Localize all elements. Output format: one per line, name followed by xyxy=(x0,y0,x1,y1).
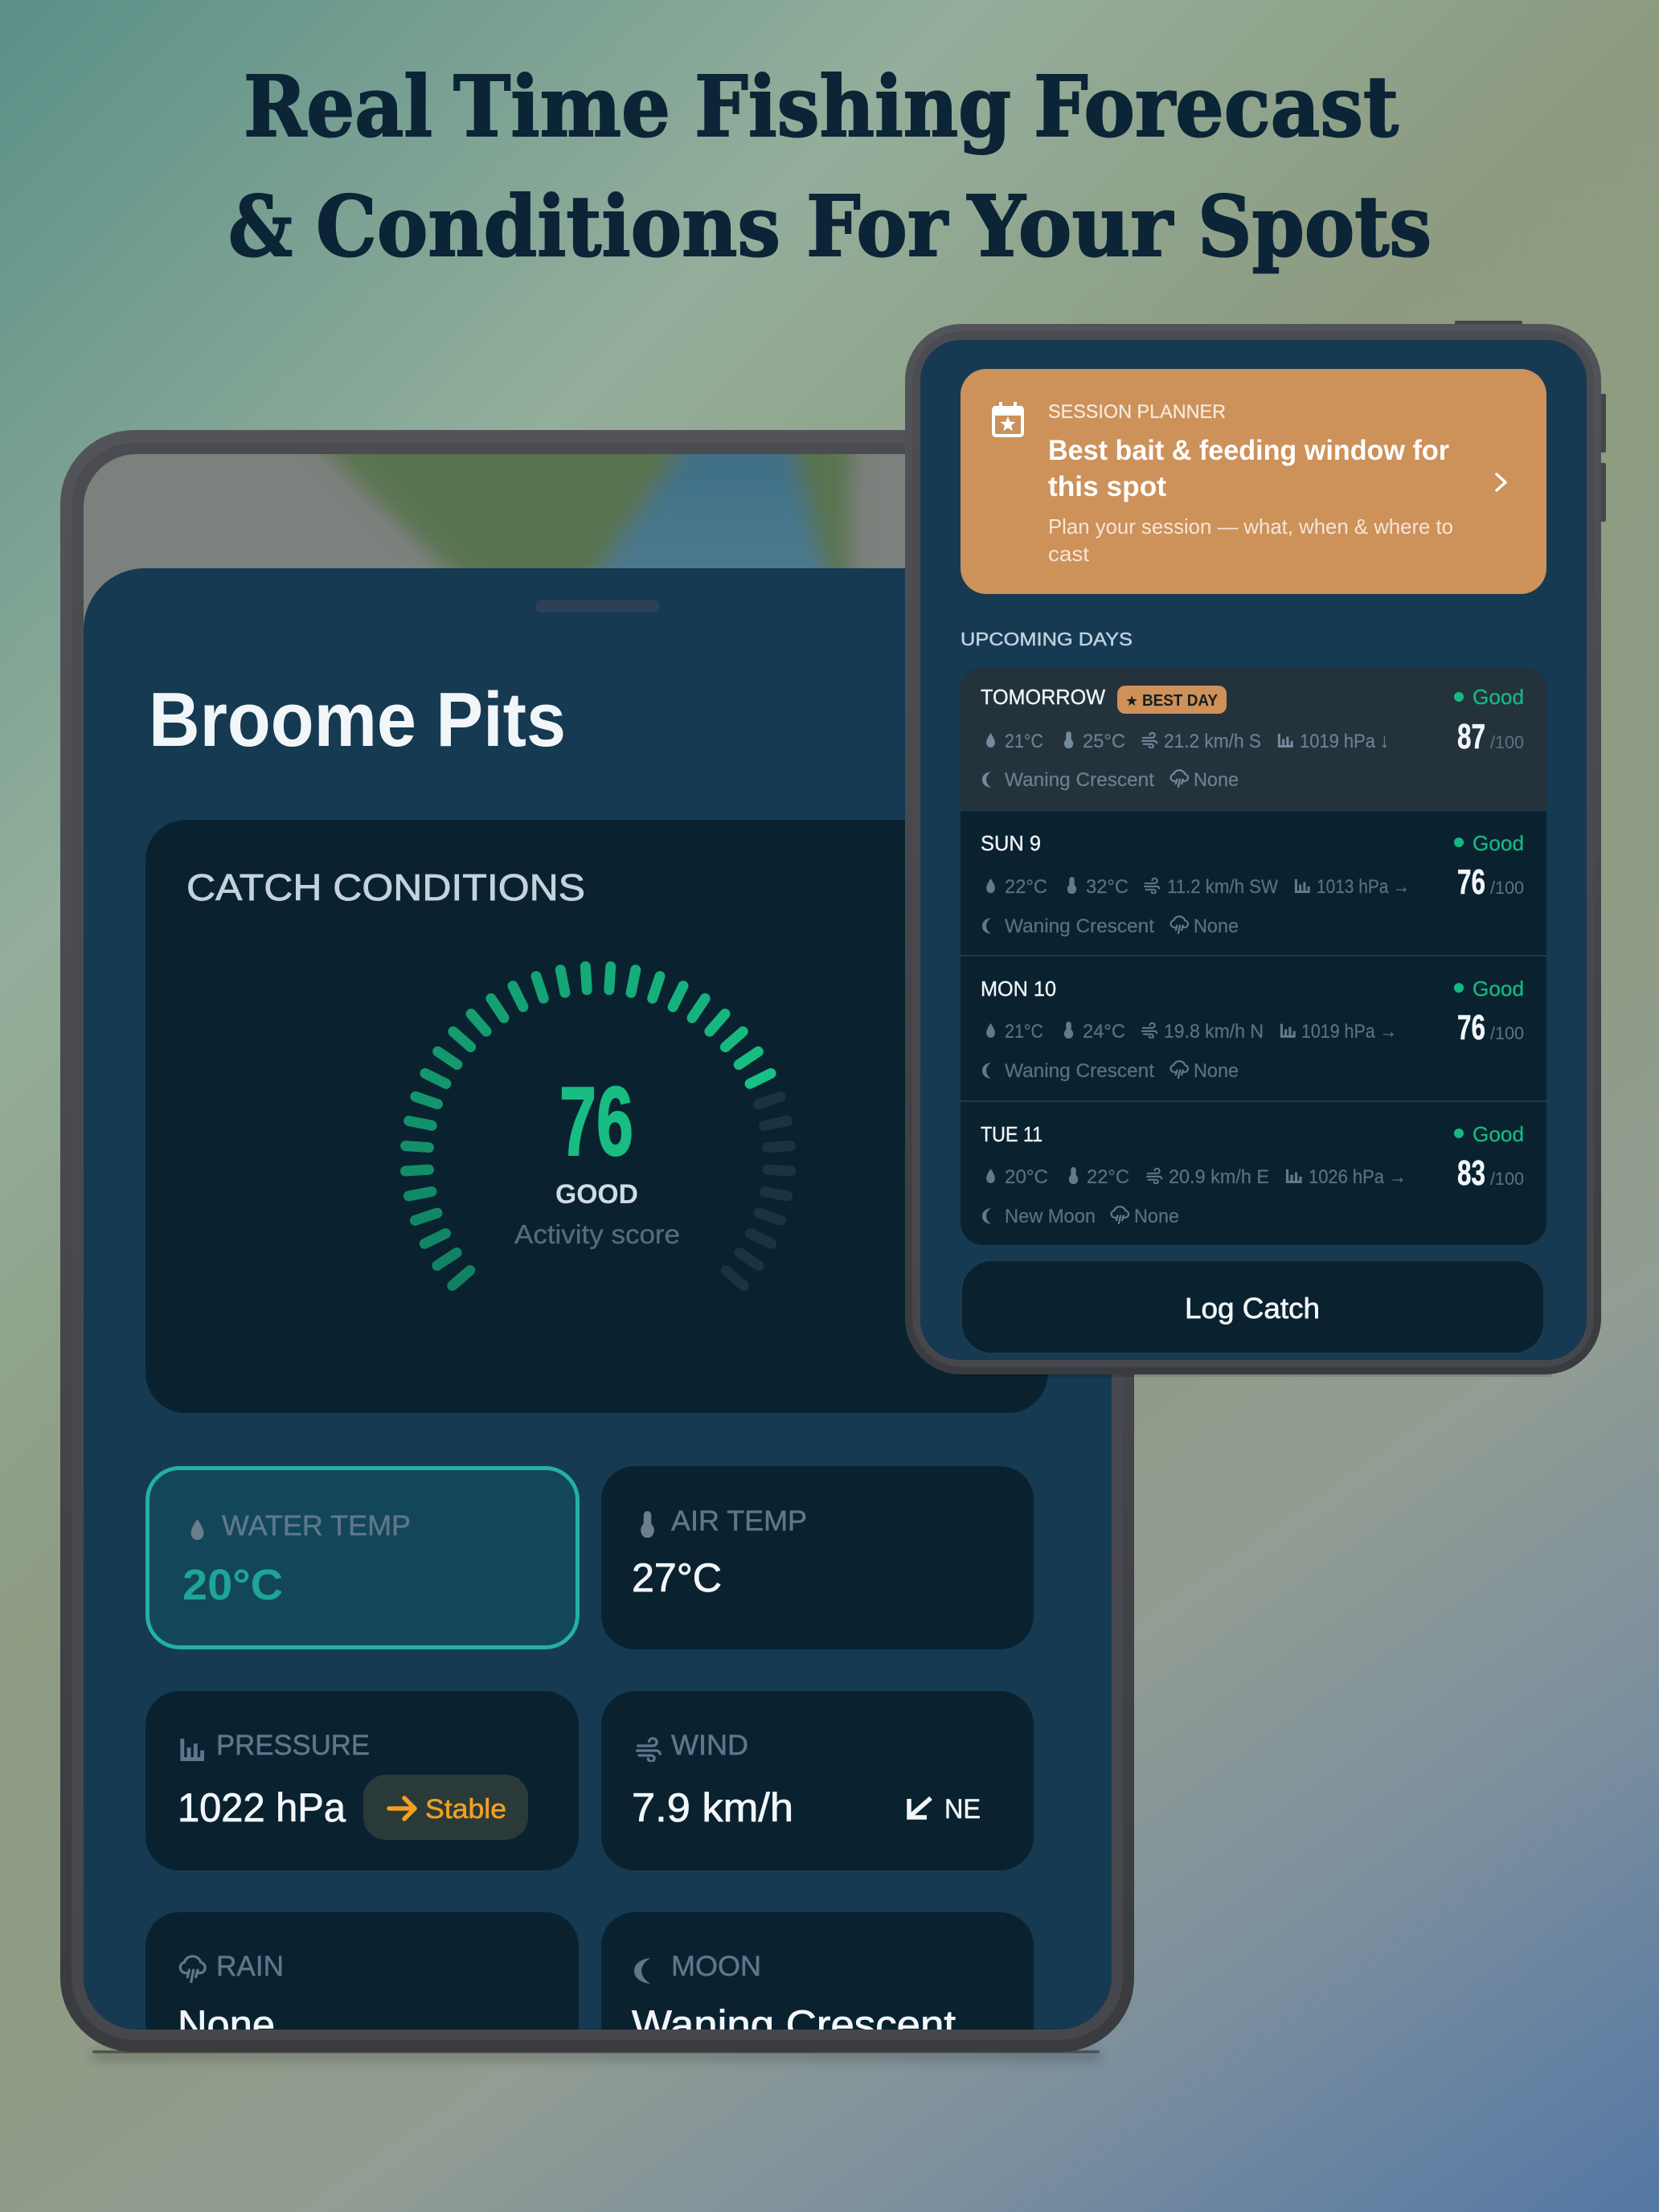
row: tomorrow: 21°C xyxy=(1005,731,1043,752)
planner headline xyxy=(1048,435,1449,502)
badge: stable: Stable xyxy=(425,1794,506,1825)
icon: rain cloud xyxy=(180,1956,205,1982)
label: pressure: PRESSURE xyxy=(216,1730,370,1761)
row: sun 9: Waning Crescent xyxy=(1005,916,1154,937)
row: sun 9: 1013 hPa → xyxy=(1317,876,1410,898)
row: mon 10: 21°C xyxy=(1005,1021,1043,1043)
card: air temp xyxy=(601,1466,1034,1649)
planner description xyxy=(1048,514,1453,566)
planner description: cast xyxy=(1048,542,1090,566)
card: water temp xyxy=(148,1468,577,1648)
badge: best day xyxy=(1117,686,1227,714)
gauge ticks xyxy=(405,967,791,1285)
title: Real xyxy=(244,57,432,156)
value: pressure: 1022 hPa xyxy=(178,1785,346,1830)
panel: catch conditions xyxy=(145,820,1048,1413)
eyebrow: SESSION PLANNER xyxy=(1048,401,1226,423)
drag handle xyxy=(535,600,660,612)
row: sun 9: /100 xyxy=(1490,878,1524,898)
value: moon: Waning Crescent xyxy=(632,2002,956,2047)
row: tomorrow xyxy=(961,667,1546,810)
row: sun 9: None xyxy=(1194,916,1239,937)
value: air temp: 27°C xyxy=(632,1555,722,1600)
row: tue 11: 1026 hPa → xyxy=(1309,1166,1407,1188)
row: tomorrow: 1019 hPa ↓ xyxy=(1300,731,1389,752)
icon: moon xyxy=(634,1958,650,1984)
planner headline: Best bait & feeding window for xyxy=(1048,435,1449,466)
title: Fishing xyxy=(694,57,1011,156)
phone: spot detail screen xyxy=(60,418,1134,2095)
row: mon 10: MON 10 xyxy=(981,977,1056,1001)
row: tomorrow: Waning Crescent xyxy=(1005,769,1154,791)
icon: calendar star xyxy=(993,402,1022,436)
title: Conditions xyxy=(316,177,780,276)
badge: best day: ★ xyxy=(1125,693,1138,709)
row: tue 11: None xyxy=(1134,1206,1179,1227)
wind direction: NE xyxy=(944,1794,981,1825)
row: mon 10: /100 xyxy=(1490,1023,1524,1043)
row: mon 10: Good xyxy=(1473,977,1524,1001)
spot name: Broome Pits xyxy=(149,677,566,763)
bottom sheet xyxy=(84,568,1112,2095)
row: tue 11 xyxy=(981,1122,1524,1227)
button: log catch xyxy=(961,1260,1544,1354)
row: tomorrow: Good xyxy=(1473,685,1524,709)
row: tue 11: 20.9 km/h E xyxy=(1169,1166,1269,1188)
row: tomorrow: 21.2 km/h S xyxy=(1164,731,1261,752)
row: tue 11: 22°C xyxy=(1087,1166,1129,1188)
card: wind xyxy=(601,1691,1034,1870)
row: tue 11: Good xyxy=(1473,1122,1524,1146)
panel: upcoming days list xyxy=(961,667,1546,1245)
row: sun 9: 11.2 km/h SW xyxy=(1167,876,1279,898)
row: sun 9: SUN 9 xyxy=(981,831,1041,855)
button: log catch: Log Catch xyxy=(1185,1292,1320,1325)
row: mon 10: 76 xyxy=(1457,1008,1485,1047)
card: moon xyxy=(601,1912,1034,2091)
row: mon 10: 24°C xyxy=(1083,1021,1125,1043)
title: For xyxy=(806,177,948,276)
label: air temp: AIR TEMP xyxy=(671,1505,807,1537)
row: tomorrow: 25°C xyxy=(1083,731,1125,752)
label: moon: MOON xyxy=(671,1951,761,1982)
heading: upcoming days: UPCOMING DAYS xyxy=(961,629,1133,649)
wind direction xyxy=(909,1794,981,1825)
row: mon 10: 1019 hPa → xyxy=(1301,1021,1397,1043)
planner headline: this spot xyxy=(1048,471,1166,502)
planner description: Plan your session — what, when & where to xyxy=(1048,514,1453,539)
row: mon 10: 19.8 km/h N xyxy=(1164,1021,1264,1043)
gauge rating: GOOD xyxy=(555,1179,638,1210)
row: tomorrow: 87 xyxy=(1457,717,1485,756)
row: tue 11: TUE 11 xyxy=(981,1122,1043,1146)
row: tomorrow: TOMORROW xyxy=(981,685,1105,709)
map preview xyxy=(84,454,905,629)
row: mon 10: None xyxy=(1194,1060,1239,1082)
value: water temp: 20°C xyxy=(182,1561,283,1609)
row: tomorrow: None xyxy=(1194,769,1239,791)
title xyxy=(228,57,1432,276)
gauge caption: Activity score xyxy=(514,1219,680,1249)
row: mon 10 xyxy=(981,977,1524,1082)
row: tue 11: 83 xyxy=(1457,1153,1485,1193)
value: wind speed: 7.9 km/h xyxy=(632,1785,793,1830)
label: water temp: WATER TEMP xyxy=(222,1510,411,1542)
hardware buttons xyxy=(1455,321,1606,522)
row: sun 9: 32°C xyxy=(1086,876,1129,898)
value: rain: None xyxy=(178,2002,275,2047)
icon: pressure bars xyxy=(180,1739,204,1761)
row: tue 11: New Moon xyxy=(1005,1206,1096,1227)
row: mon 10: Waning Crescent xyxy=(1005,1060,1154,1082)
row: tue 11: /100 xyxy=(1490,1169,1524,1189)
card: pressure xyxy=(145,1691,579,1870)
panel: session planner xyxy=(961,369,1546,594)
label: rain: RAIN xyxy=(216,1951,284,1982)
row: sun 9: 76 xyxy=(1457,862,1485,902)
row: tue 11: 20°C xyxy=(1005,1166,1048,1188)
title: & xyxy=(228,177,293,276)
icon: thermometer xyxy=(641,1511,654,1538)
title: Your xyxy=(967,177,1174,276)
label: wind: WIND xyxy=(671,1730,748,1761)
row: sun 9: Good xyxy=(1473,831,1524,855)
card: rain xyxy=(145,1912,579,2091)
heading: catch conditions: CATCH CONDITIONS xyxy=(186,866,585,908)
badge: best day: BEST DAY xyxy=(1142,692,1219,710)
icon: water drop xyxy=(191,1519,203,1540)
title: Forecast xyxy=(1034,57,1399,156)
icon: wind xyxy=(637,1739,660,1761)
badge: stable xyxy=(363,1775,528,1840)
row: sun 9: 22°C xyxy=(1005,876,1047,898)
title: Spots xyxy=(1198,177,1432,276)
title: Time xyxy=(453,57,670,156)
phone: session planner screen xyxy=(905,321,1606,1377)
icon: chevron xyxy=(1497,474,1505,490)
row: tomorrow: /100 xyxy=(1490,732,1524,752)
row: sun 9 xyxy=(981,831,1524,937)
gauge score: 76 xyxy=(559,1067,633,1176)
